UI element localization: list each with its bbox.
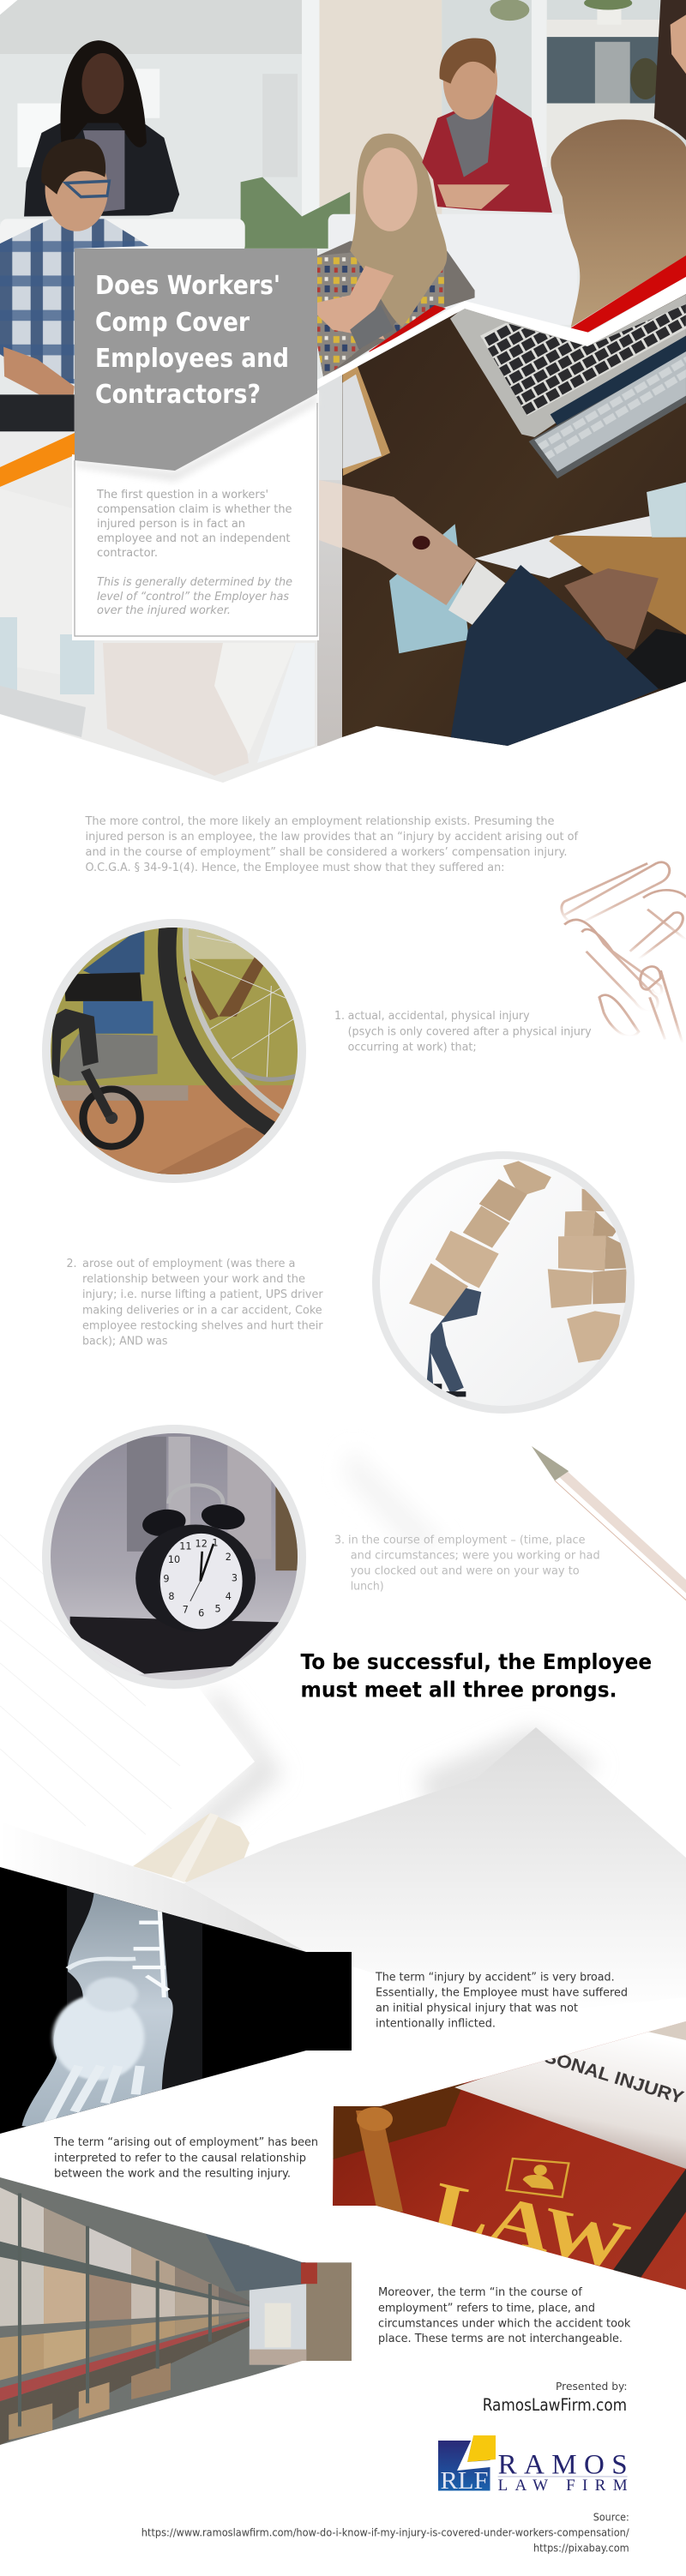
item 2 text: back); AND was xyxy=(82,1334,168,1348)
clock numerals: 5 xyxy=(215,1604,221,1615)
clock numerals: 12 xyxy=(196,1539,208,1550)
clipboard xyxy=(342,366,390,476)
laptop xyxy=(450,295,686,478)
woman seen from behind xyxy=(551,0,686,327)
orange accent strip xyxy=(0,433,75,487)
clock numerals: 10 xyxy=(168,1554,180,1565)
middle tier xyxy=(0,2257,44,2327)
photo: warehouse shelves xyxy=(0,2172,354,2450)
item 3 text: lunch) xyxy=(351,1579,384,1593)
photo: law book and gavel xyxy=(330,2010,686,2297)
man in red sweater xyxy=(422,39,552,213)
presented by: Presented by: xyxy=(556,2380,628,2393)
note: in the course of employment: place. These terms are not interchangeable. xyxy=(378,2332,623,2345)
note: in the course of employment xyxy=(378,2285,631,2345)
paragraph: control and employment: injured person is an employee, the law provides that an “injury by accident arising out of xyxy=(86,830,579,844)
item 1 text: occurring at work) that; xyxy=(348,1041,477,1054)
clock numerals: 4 xyxy=(226,1591,232,1602)
paragraph: control and employment: O.C.G.A. § 34-9-1(4). Hence, the Employee must show that they suffered an: xyxy=(86,861,504,874)
title panel: Comp Cover xyxy=(95,308,250,338)
lower tier xyxy=(0,2333,44,2381)
item 2 text: arose out of employment (was there a xyxy=(82,1257,295,1270)
item 1 text: (psych is only covered after a physical injury xyxy=(348,1025,592,1039)
gold book title: LAW xyxy=(425,2167,636,2285)
item 2 text: 2. xyxy=(67,1257,77,1270)
title panel: Does Workers' xyxy=(95,271,280,301)
intro italic text: level of “control” the Employer has xyxy=(97,590,289,603)
title panel: Employees and xyxy=(95,344,289,374)
handshake and suit xyxy=(342,483,686,753)
hero photo: desk handshake xyxy=(342,294,686,746)
item 1 text xyxy=(334,1009,592,1054)
presented by xyxy=(483,2380,628,2415)
clock numerals: 6 xyxy=(198,1608,204,1619)
paragraph: control and employment: The more control, the more likely an employment relationship exists. Presuming the xyxy=(85,814,555,828)
item 1 text: 1. xyxy=(334,1009,345,1023)
note: injury by accident: The term “injury by accident” is very broad. xyxy=(375,1971,615,1985)
intro body text: employee and not an independent xyxy=(97,531,290,545)
photo: foot x-ray xyxy=(0,1860,352,2143)
decoration: pencil xyxy=(532,1446,686,1609)
man in plaid shirt xyxy=(0,139,148,466)
clock numerals: 7 xyxy=(183,1605,189,1616)
intro italic text xyxy=(97,575,292,617)
item 3 text: 3. xyxy=(334,1533,345,1546)
personal injury label: PERSONAL INJURY xyxy=(503,2035,686,2108)
item 3 text: in the course of employment – (time, place xyxy=(348,1533,585,1546)
clock numerals: 9 xyxy=(163,1574,169,1585)
intro body text: contractor. xyxy=(97,546,158,560)
paragraph: control and employment xyxy=(85,814,579,874)
background paper and shadows xyxy=(0,1449,686,2015)
intro body text: compensation claim is whether the xyxy=(97,502,292,516)
item 1 text: actual, accidental, physical injury xyxy=(348,1009,530,1023)
note: arising out of employment xyxy=(53,2135,318,2181)
note: in the course of employment: circumstances under which the accident took xyxy=(378,2316,631,2330)
note: injury by accident: intentionally inflicted. xyxy=(376,2016,496,2030)
item 2 text: employee restocking shelves and hurt their xyxy=(82,1318,323,1332)
woman in black jacket xyxy=(24,40,179,217)
white panel xyxy=(72,390,319,640)
clock numerals: 1 xyxy=(212,1538,219,1549)
note: injury by accident: Essentially, the Employee must have suffered xyxy=(376,1986,628,2000)
intro body text: injured person is in fact an xyxy=(97,517,245,531)
red accent strip left xyxy=(369,305,446,352)
gold badge xyxy=(507,2159,569,2197)
source credits: https://www.ramoslawfirm.com/how-do-i-know-if-my-injury-is-covered-under-workers-compensation/ xyxy=(141,2526,629,2539)
clock numerals: 8 xyxy=(168,1591,175,1602)
note: in the course of employment: Moreover, the term “in the course of xyxy=(378,2285,583,2299)
presented by: RamosLawFirm.com xyxy=(483,2395,627,2415)
faded photo lower left xyxy=(0,369,342,789)
intro italic text: This is generally determined by the xyxy=(97,575,292,589)
top tier xyxy=(0,2188,44,2253)
text panel: intro xyxy=(72,249,319,640)
item 2 text: injury; i.e. nurse lifting a patient, UPS driver xyxy=(82,1288,323,1301)
clock numerals: 2 xyxy=(226,1552,232,1563)
source credits: https://pixabay.com xyxy=(533,2542,629,2555)
title panel xyxy=(75,249,317,471)
callout: three prongs xyxy=(300,1649,652,1702)
source credits: Source: xyxy=(593,2511,629,2524)
grey folded wedge right xyxy=(184,1727,686,2015)
source credits xyxy=(141,2511,629,2555)
title panel: Contractors? xyxy=(95,380,261,410)
intro body text xyxy=(96,488,292,560)
logo: Ramos Law Firm: RLF xyxy=(441,2467,489,2495)
hero photo: office meeting xyxy=(0,0,686,517)
note: injury by accident xyxy=(375,1971,628,2030)
note: in the course of employment: employment” refers to time, place, and xyxy=(378,2301,595,2315)
white chevron band xyxy=(317,277,686,388)
item 3 text xyxy=(334,1533,600,1593)
paragraph: control and employment: and in the course of employment” shall be considered a workers’ compensation injury. xyxy=(86,845,568,859)
decoration: paper clips xyxy=(562,862,686,1043)
note: injury by accident: an initial physical injury that was not xyxy=(376,2002,578,2015)
item 3 text: you clocked out and were on your way to xyxy=(351,1564,580,1578)
intro body text: The first question in a workers' xyxy=(96,488,268,501)
floor tier xyxy=(0,2321,250,2445)
note: arising out of employment: between the work and the resulting injury. xyxy=(54,2167,291,2181)
item 3 text: and circumstances; were you working or had xyxy=(351,1549,600,1563)
clock numerals: 3 xyxy=(232,1573,238,1584)
clock numerals: 11 xyxy=(179,1541,191,1552)
callout: three prongs: To be successful, the Employee xyxy=(300,1649,652,1674)
logo: Ramos Law Firm: RAMOS xyxy=(498,2450,628,2481)
circle photo: alarm clock xyxy=(42,1425,306,1690)
logo: Ramos Law Firm xyxy=(438,2435,628,2495)
item 2 text: relationship between your work and the xyxy=(82,1272,305,1286)
circle photo: man carrying boxes xyxy=(372,1151,635,1414)
red accent strip right xyxy=(570,255,686,333)
item 2 text xyxy=(67,1257,323,1348)
intro italic text: over the injured worker. xyxy=(97,603,231,617)
grey folded wedge left xyxy=(0,1822,306,1952)
note: arising out of employment: interpreted to refer to the causal relationship xyxy=(54,2152,306,2165)
circle photo: wheelchair xyxy=(42,919,306,1183)
logo: Ramos Law Firm: LAW FIRM xyxy=(498,2477,628,2495)
note: arising out of employment: The term “arising out of employment” has been xyxy=(53,2135,318,2149)
item 2 text: making deliveries or in a car accident, Coke xyxy=(82,1303,322,1317)
small beige notebook xyxy=(133,1813,250,1882)
callout: three prongs: must meet all three prongs. xyxy=(300,1677,617,1702)
woman with long blonde hair xyxy=(317,134,475,379)
